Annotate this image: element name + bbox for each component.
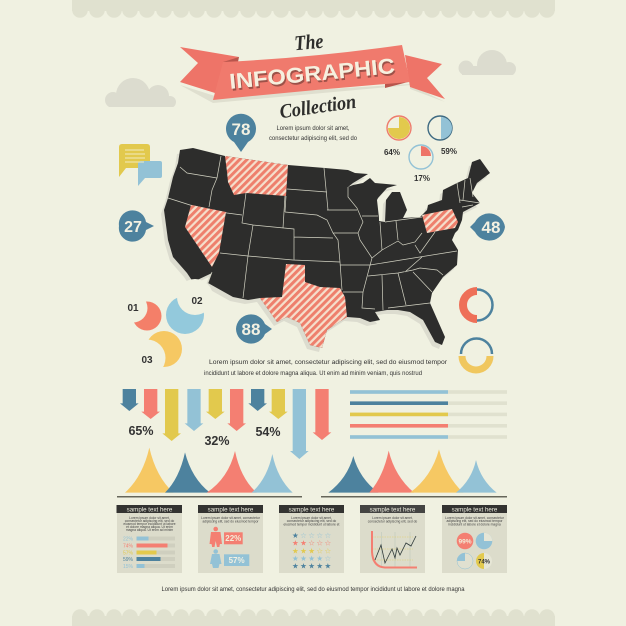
card 5 text: [445, 516, 505, 526]
card 1 bar rows: 57%: [123, 550, 134, 556]
card 3 text: [284, 516, 340, 526]
text block: footer: Lorem ipsum dolor sit amet, consectetur adipiscing elit, sed do eiusmod tempor incididunt ut labore et dolore magna: [162, 586, 465, 593]
card 4 header: sample text here: [370, 506, 416, 514]
peaks chart left: [125, 448, 293, 493]
crescent 02: [166, 279, 213, 334]
card 1 bar rows: 22%: [123, 536, 134, 542]
text block: map caption: [204, 359, 448, 377]
highlighted state: Texas: [260, 264, 347, 348]
pie blue quarter: [457, 553, 473, 569]
horizontal bar chart: [350, 390, 507, 439]
star rating rows: ★★☆☆☆: [292, 539, 333, 548]
card 1 text: [123, 516, 176, 532]
crescent 03: 03: [141, 355, 153, 366]
baseline left: [117, 496, 302, 498]
panel: card 2 people: [198, 505, 263, 573]
icon: blue person: [210, 549, 222, 568]
card 4 text: [368, 516, 417, 524]
pie chart 59%: [428, 116, 457, 156]
callout pin 48: 48: [482, 218, 500, 237]
pie chart 17%: 17%: [414, 174, 430, 183]
icon: cloud left: [105, 78, 176, 107]
title: The: The: [293, 29, 324, 55]
card 1 text: consectetur adipiscing elit, sed do: [125, 519, 174, 523]
blue stat box 57%: 57%: [229, 556, 245, 565]
panel: card 5 pies: [442, 505, 507, 573]
card 3 text: Lorem ipsum dolor sit amet,: [291, 516, 332, 520]
text block: top intro: [269, 125, 358, 142]
card 1 bar rows: [123, 536, 175, 570]
card 1 bar rows: 59%: [123, 557, 134, 563]
text block: map caption: incididunt ut labore et dolore magna aliqua. Ut enim ad minim veniam, quis nostrud: [204, 370, 422, 377]
card 2 text: Lorem ipsum dolor sit amet, consectetur: [201, 516, 261, 520]
card 2 text: adipiscing elit, sed do eiusmod tempor: [202, 520, 259, 524]
icon: cloud right: [458, 50, 516, 75]
highlighted state: Pennsylvania: [422, 209, 458, 233]
callout pin 48: [470, 213, 505, 241]
peaks chart right: [328, 449, 497, 493]
card 5 text: incididunt ut labore et dolore magna: [448, 522, 501, 526]
star rating rows: [292, 531, 333, 571]
card 4 text: consectetur adipiscing elit, sed do: [368, 520, 417, 524]
salmon stat box 22%: 22%: [225, 534, 241, 543]
card 1 text: et dolore magna aliqua. Ut enim: [126, 525, 173, 529]
callout pin 88: 88: [242, 320, 260, 339]
card 2 header: sample text here: [208, 506, 254, 514]
card 4 text: Lorem ipsum dolor sit amet,: [372, 516, 413, 520]
text block: top intro: Lorem ipsum dolor sit amet,: [276, 125, 350, 132]
crescent 01: [118, 294, 162, 330]
card 1 bar rows: 74%: [123, 544, 134, 550]
card 1 text: eiusmod tempor incididunt ut labore: [123, 522, 176, 526]
pie blue three quarter: [476, 533, 492, 549]
percentage labels: 32%: [204, 434, 230, 448]
star rating rows: ★★★★★: [292, 562, 333, 571]
card 1 text: Lorem ipsum dolor sit amet,: [129, 516, 170, 520]
card 5 text: adipiscing elit, sed do eiusmod tempor: [446, 519, 503, 523]
bottom scalloped band: [72, 609, 555, 626]
icon: salmon person: [210, 527, 222, 547]
card 3 text: consectetur adipiscing elit, sed do: [287, 519, 336, 523]
callout pin 88: [236, 314, 272, 344]
baseline right: [321, 496, 507, 498]
pie 74%: 74%: [478, 560, 491, 566]
donut chart salmon and blue: [463, 290, 492, 320]
card 1 bar rows: 15%: [123, 564, 134, 570]
card 2 text: [201, 516, 261, 524]
callout pin 27: [119, 210, 154, 242]
ribbon banner: [180, 45, 445, 103]
pie chart 64%: 64%: [384, 148, 400, 157]
percentage labels: 65%: [128, 424, 154, 438]
card 3 header: sample text here: [289, 506, 335, 514]
line chart: [372, 531, 417, 568]
callout pin 27: 27: [124, 219, 142, 236]
map landmass: [164, 148, 490, 348]
star rating rows: ★☆☆☆☆: [292, 531, 333, 540]
card 5 text: Lorem ipsum dolor sit amet, consectetur: [445, 516, 505, 520]
ribbon title text: INFOGRAPHIC: [230, 56, 397, 96]
pie 99%: 99%: [458, 538, 472, 546]
subtitle: Collection: Collection: [278, 91, 358, 123]
card 3 text: eiusmod tempor incididunt ut labore et: [284, 522, 340, 526]
crescent 03: [128, 331, 182, 376]
callout pin 78: 78: [232, 120, 250, 139]
highlighted state: Nevada: [185, 205, 226, 267]
text block: top intro: consectetur adipiscing elit, sed do: [269, 135, 358, 142]
percentage labels: [128, 424, 281, 448]
crescent 02: 02: [191, 296, 203, 307]
donut chart blue and yellow: [461, 338, 492, 370]
card 1 header: sample text here: [127, 506, 173, 514]
map shadow: [161, 152, 487, 352]
state borders: [168, 156, 480, 310]
card 5 header: sample text here: [452, 506, 498, 514]
text block: map caption: Lorem ipsum dolor sit amet, consectetur adipiscing elit, sed do eiusmod tempor: [209, 359, 448, 366]
crescent 01: 01: [127, 303, 139, 314]
panel: card 4 line chart: [360, 505, 425, 573]
star rating rows: ★★★★☆: [292, 554, 333, 563]
percentage labels: 54%: [255, 425, 281, 439]
top scalloped band: [72, 0, 555, 18]
panel: card 3 star ratings: [279, 505, 344, 573]
ribbon title text: INFOGRAPHIC: [228, 54, 396, 94]
pie chart 59%: 59%: [441, 147, 457, 156]
pie chart 17%: [409, 145, 433, 183]
star rating rows: ★★★☆☆: [292, 546, 333, 555]
card 1 text: magna aliqua. Ut enim ad minim: [126, 528, 173, 532]
callout pin 78: [226, 114, 256, 152]
icon: speech bubbles: [119, 144, 162, 186]
map of the United States: [161, 148, 490, 352]
arrows chart: [120, 389, 331, 459]
pie chart 64%: [384, 116, 411, 157]
highlighted state: Montana: [225, 156, 288, 196]
panel: card 1 bars: [116, 505, 182, 573]
